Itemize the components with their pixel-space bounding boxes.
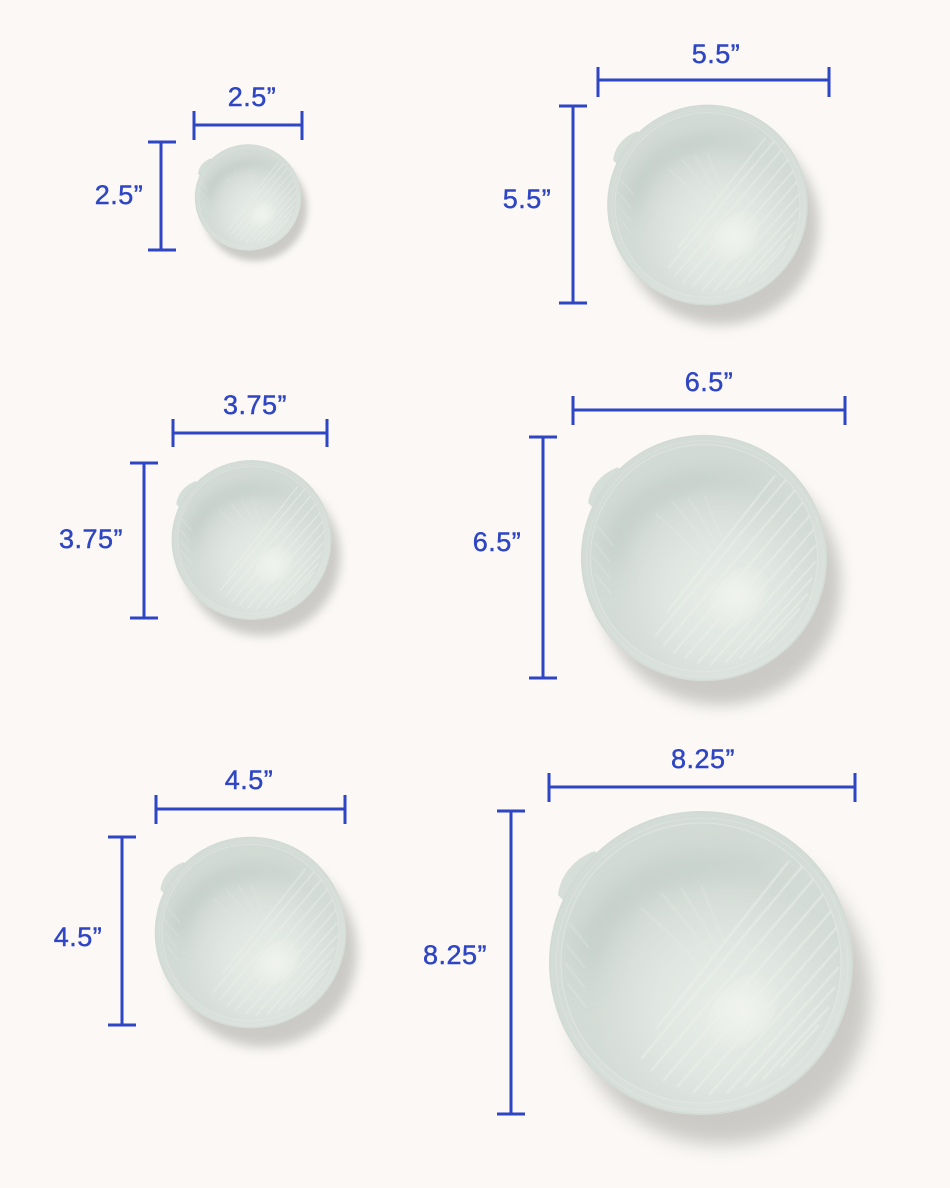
dimension: 8.25 inch height xyxy=(423,811,525,1114)
dimension: 3.75 inch width: 3.75” xyxy=(223,390,287,420)
lid: 8.25 inch xyxy=(549,811,870,1145)
dimension: 8.25 inch width xyxy=(549,744,855,802)
dimension: 2.5 inch height: 2.5” xyxy=(95,180,143,210)
dimension: 5.5 inch width xyxy=(598,39,829,97)
dimension: 6.5 inch width: 6.5” xyxy=(685,367,733,397)
dimension: 2.5 inch width xyxy=(194,82,302,140)
dimension: 5.5 inch height: 5.5” xyxy=(503,184,551,214)
dimension: 6.5 inch height xyxy=(473,437,557,678)
dimension: 6.5 inch width xyxy=(573,367,845,425)
lid: 3.75 inch xyxy=(172,460,340,636)
dimension: 3.75 inch width xyxy=(173,390,327,447)
lid: 6.5 inch xyxy=(581,435,841,705)
dimension: 3.75 inch height: 3.75” xyxy=(59,524,123,554)
dimension: 8.25 inch width: 8.25” xyxy=(671,744,735,774)
dimension: 5.5 inch height xyxy=(503,106,587,303)
lid: 5.5 inch xyxy=(607,105,819,325)
dimension: 3.75 inch height xyxy=(59,463,158,618)
dimension: 2.5 inch width: 2.5” xyxy=(228,82,276,112)
dimension: 4.5 inch height xyxy=(54,837,136,1025)
dimension: 4.5 inch height: 4.5” xyxy=(54,922,102,952)
dimension: 8.25 inch height: 8.25” xyxy=(423,940,487,970)
lid: 2.5 inch xyxy=(195,144,307,261)
lid: 4.5 inch xyxy=(155,837,357,1047)
dimension: 6.5 inch height: 6.5” xyxy=(473,527,521,557)
dimension: 5.5 inch width: 5.5” xyxy=(692,39,740,69)
dimension: 4.5 inch width: 4.5” xyxy=(225,765,273,795)
dimension: 4.5 inch width xyxy=(156,765,345,824)
dimension: 2.5 inch height xyxy=(95,142,176,250)
